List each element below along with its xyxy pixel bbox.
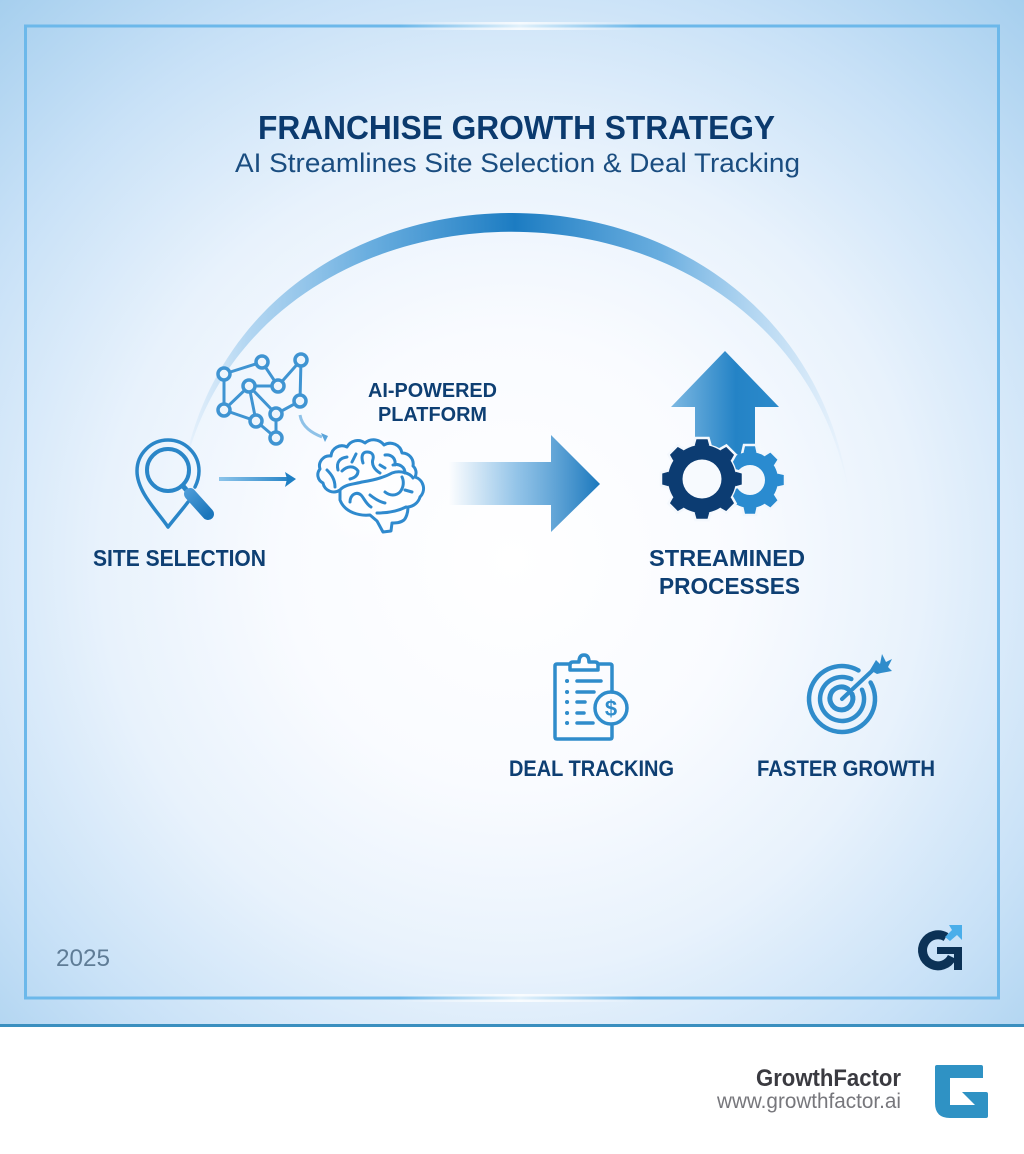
label: deal tracking: DEAL TRACKING xyxy=(509,756,674,781)
icon: footer G logo xyxy=(935,1065,988,1118)
label: streamlined processes: STREAMINED xyxy=(649,545,805,571)
label: faster growth: FASTER GROWTH xyxy=(757,756,935,781)
subtitle: AI Streamlines Site Selection & Deal Tracking xyxy=(235,148,800,178)
icon: target with arrow xyxy=(809,654,892,732)
arrow: large gradient arrow xyxy=(449,435,600,532)
icon: location pin with magnifier xyxy=(137,440,208,527)
icon: upward arrow xyxy=(671,351,779,460)
footer brand name: GrowthFactor xyxy=(756,1065,901,1092)
dollar sign: $ xyxy=(605,696,617,721)
arrow: network to brain xyxy=(300,415,328,442)
label: streamlined processes: PROCESSES xyxy=(659,573,800,599)
label: streamlined processes xyxy=(649,545,805,599)
arrow: site selection to brain xyxy=(219,472,296,487)
year: 2025 xyxy=(56,945,110,972)
label: AI-powered platform: PLATFORM xyxy=(378,403,487,426)
icon: large gear xyxy=(661,438,743,520)
footer panel xyxy=(0,1024,1024,1154)
label: AI-powered platform: AI-POWERED xyxy=(368,379,497,402)
label: AI-powered platform xyxy=(368,379,497,426)
footer url: www.growthfactor.ai xyxy=(716,1090,901,1113)
title: FRANCHISE GROWTH STRATEGY xyxy=(258,109,775,146)
icon: small G logo xyxy=(923,925,962,970)
label: site selection: SITE SELECTION xyxy=(93,545,266,571)
icon: clipboard with dollar xyxy=(555,655,627,739)
icon: brain xyxy=(307,426,431,550)
icon: small gear xyxy=(715,445,785,515)
icon: network graph xyxy=(218,354,307,444)
growth arc xyxy=(180,213,850,500)
